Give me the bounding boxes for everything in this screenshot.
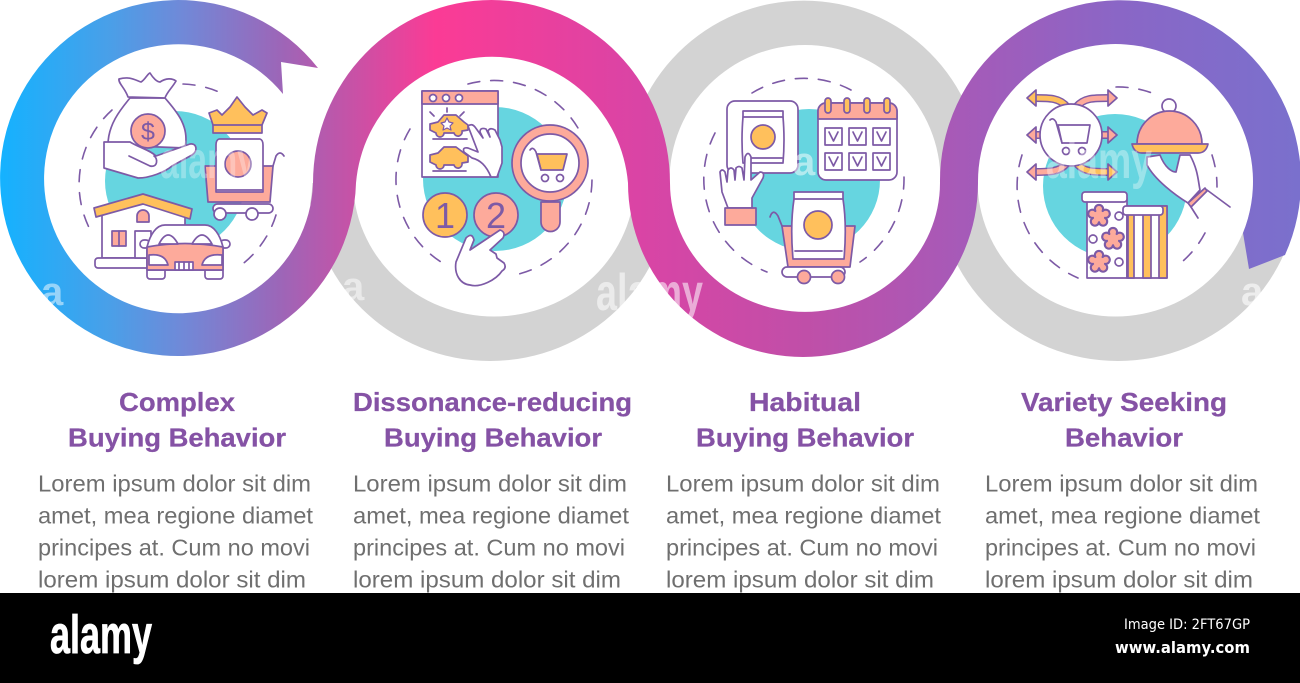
body text: complex: principes at. Cum no movi xyxy=(38,534,310,560)
watermarks: a xyxy=(41,270,64,314)
heading: complex: Buying Behavior xyxy=(68,422,286,452)
body text: habitual: principes at. Cum no movi xyxy=(666,534,938,560)
watermarks xyxy=(41,132,1264,322)
watermarks: alamy xyxy=(1046,132,1152,190)
footer site url: www.alamy.com xyxy=(1115,638,1250,657)
body text: dissonance-reducing: Lorem ipsum dolor sit dim xyxy=(353,470,627,496)
white inner discs xyxy=(44,44,1254,316)
icon: dissonance-reducing collage: 2 xyxy=(486,195,506,236)
panel: variety seeking behavior xyxy=(985,87,1261,592)
icon: complex buying collage: $ xyxy=(141,118,155,146)
heading: complex: Complex xyxy=(119,387,236,417)
watermarks: alamy xyxy=(160,132,256,190)
icon: variety seeking collage xyxy=(1017,87,1230,278)
footer bar xyxy=(0,593,1300,683)
watermarks: a xyxy=(342,265,365,309)
footer image id: Image ID: 2FT67GP xyxy=(1124,617,1250,633)
icon: dissonance-reducing collage xyxy=(396,80,592,286)
gray background rings xyxy=(309,1,1299,361)
icon: dissonance-reducing collage: 1 xyxy=(435,195,455,236)
heading: variety seeking: Behavior xyxy=(1065,422,1183,452)
heading: habitual: Habitual xyxy=(749,387,861,417)
body text: habitual: amet, mea regione diamet xyxy=(666,502,942,528)
body text: dissonance-reducing: principes at. Cum no movi xyxy=(353,534,625,560)
body text: variety seeking: lorem ipsum dolor sit dim xyxy=(985,566,1253,592)
body text: dissonance-reducing: amet, mea regione diamet xyxy=(353,502,630,528)
body text: habitual: Lorem ipsum dolor sit dim xyxy=(666,470,940,496)
body text: variety seeking: principes at. Cum no movi xyxy=(985,534,1256,560)
heading: variety seeking: Variety Seeking xyxy=(1021,387,1227,417)
heading: habitual: Buying Behavior xyxy=(696,422,914,452)
panel: dissonance-reducing buying behavior xyxy=(353,80,632,592)
icon: complex buying collage xyxy=(79,73,284,279)
panel: habitual buying behavior xyxy=(666,78,942,592)
watermarks: a xyxy=(793,140,816,184)
footer logo: alamy xyxy=(50,605,152,665)
heading: dissonance-reducing: Dissonance-reducing xyxy=(353,387,632,417)
heading: dissonance-reducing: Buying Behavior xyxy=(384,422,602,452)
body text: variety seeking: Lorem ipsum dolor sit dim xyxy=(985,470,1258,496)
body text: complex: amet, mea regione diamet xyxy=(38,502,314,528)
body text: dissonance-reducing: lorem ipsum dolor sit dim xyxy=(353,566,621,592)
icon: habitual buying collage xyxy=(704,78,904,283)
body text: complex: Lorem ipsum dolor sit dim xyxy=(38,470,311,496)
watermarks: a xyxy=(1241,270,1264,314)
panel: complex buying behavior xyxy=(38,73,314,592)
body text: variety seeking: amet, mea regione diamet xyxy=(985,502,1261,528)
body text: complex: lorem ipsum dolor sit dim xyxy=(38,566,306,592)
watermarks: alamy xyxy=(596,264,703,322)
gradient ribbon with arrow ends xyxy=(0,0,1300,357)
body text: habitual: lorem ipsum dolor sit dim xyxy=(666,566,934,592)
